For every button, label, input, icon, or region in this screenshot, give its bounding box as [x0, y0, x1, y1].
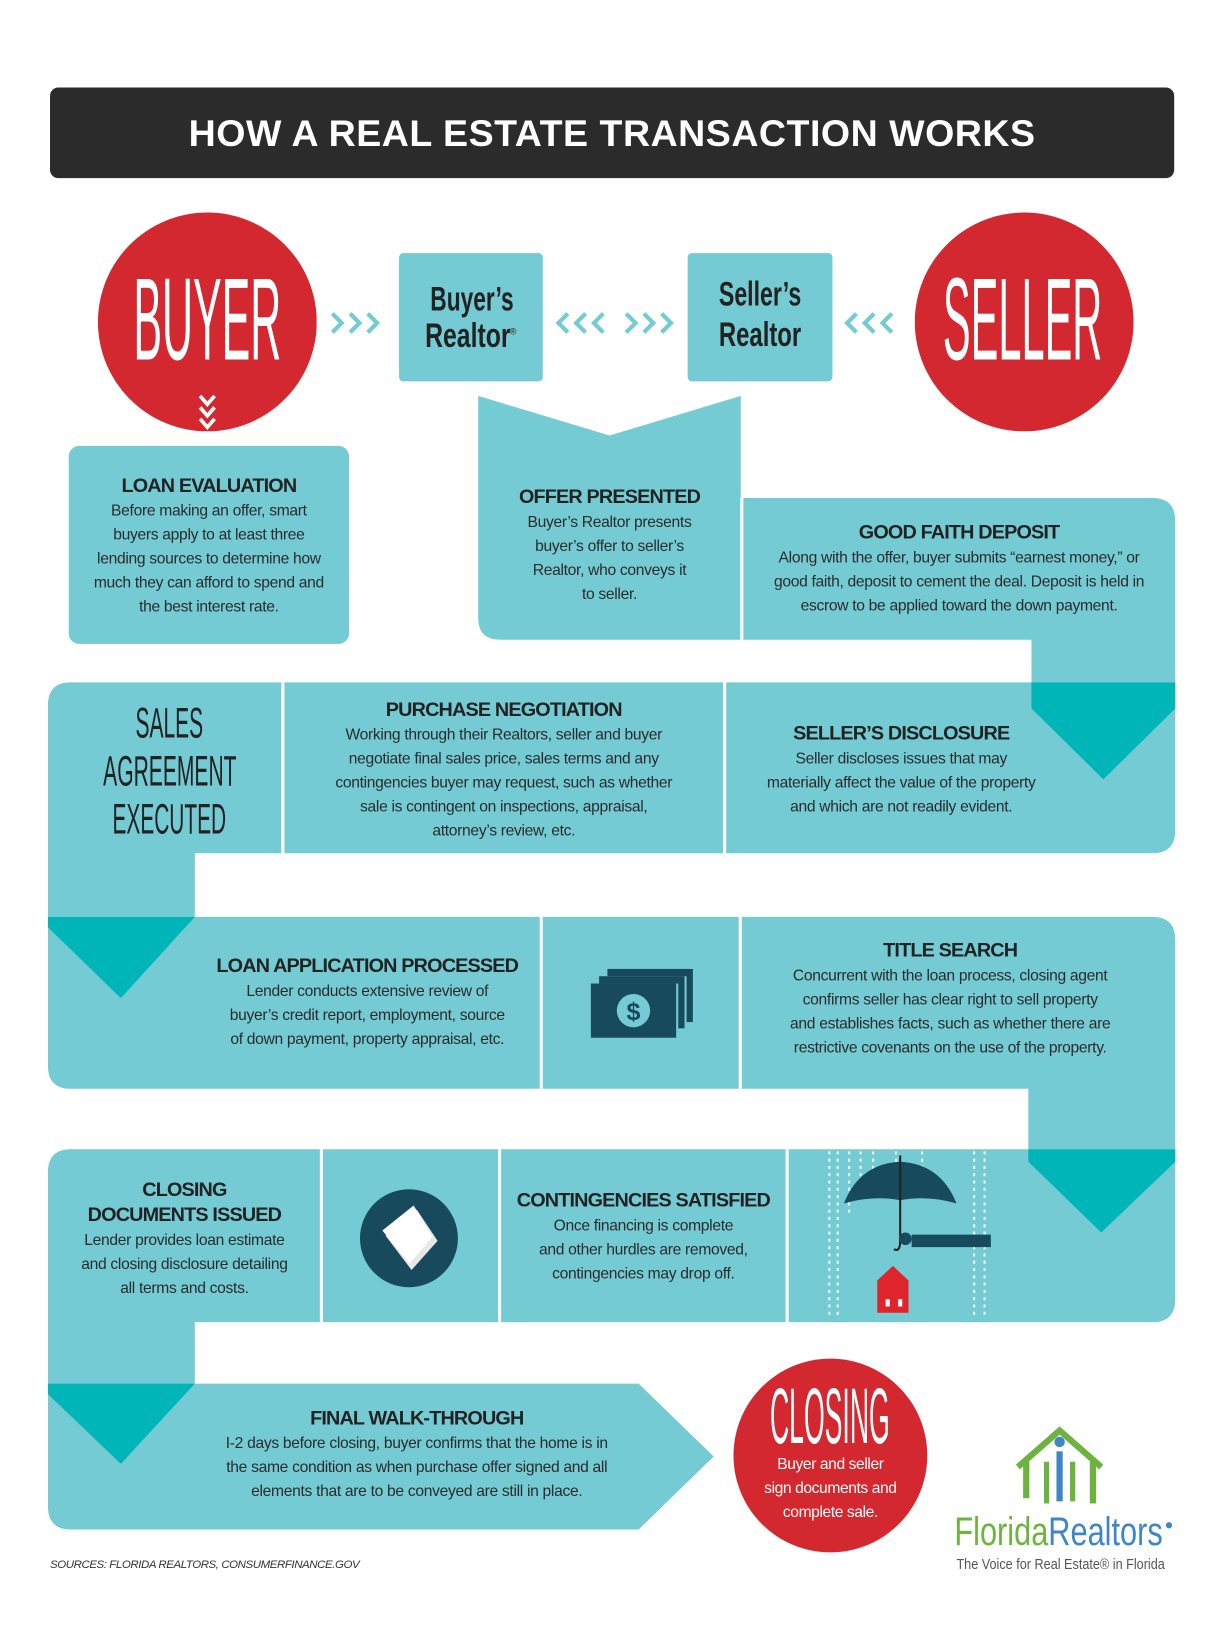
seller's disclosure: and which are not readily evident.	[790, 798, 1012, 816]
title bar: HOW A REAL ESTATE TRANSACTION WORKS	[189, 111, 1036, 154]
closing circle: complete sale.	[783, 1503, 878, 1521]
offer presented: Realtor, who conveys it	[533, 562, 686, 579]
title search	[790, 940, 1110, 1056]
closing documents issued: CLOSING	[142, 1179, 227, 1201]
contingencies satisfied: CONTINGENCIES SATISFIED	[517, 1190, 770, 1212]
good faith deposit: good faith, deposit to cement the deal. Deposit is held in	[774, 573, 1144, 591]
contingencies satisfied: and other hurdles are removed,	[539, 1241, 748, 1259]
title search: restrictive covenants on the use of the property.	[794, 1039, 1107, 1056]
seller's realtor label	[719, 275, 801, 354]
loan application processed: LOAN APPLICATION PROCESSED	[216, 955, 518, 977]
good faith deposit: escrow to be applied toward the down payment.	[801, 597, 1118, 615]
logo: florida realtors	[954, 1426, 1172, 1573]
contingencies satisfied: Once financing is complete	[554, 1217, 733, 1235]
loan application processed: buyer’s credit report, employment, source	[230, 1006, 505, 1024]
sales agreement executed	[103, 700, 237, 844]
final walk-through	[226, 1408, 608, 1500]
title search: confirms seller has clear right to sell property	[803, 991, 1098, 1009]
final walk-through: elements that are to be conveyed are still in place.	[251, 1483, 582, 1500]
final walk-through: FINAL WALK-THROUGH	[310, 1408, 523, 1429]
loan evaluation	[94, 475, 324, 616]
icon: umbrella over house in rain	[828, 1151, 991, 1315]
final walk-through: the same condition as when purchase offer signed and all	[226, 1459, 607, 1476]
buyer's realtor label: ®	[509, 326, 516, 336]
loan evaluation: buyers apply to at least three	[113, 526, 305, 544]
purchase negotiation: contingencies buyer may request, such as whether	[335, 774, 672, 792]
loan application processed: of down payment, property appraisal, etc.	[230, 1030, 504, 1048]
offer presented: Buyer’s Realtor presents	[528, 514, 691, 531]
seller's disclosure	[767, 723, 1036, 816]
arrows buyer to realtor	[331, 312, 380, 334]
buyer circle	[98, 212, 317, 432]
closing documents issued: and closing disclosure detailing	[81, 1255, 288, 1273]
seller circle	[914, 212, 1134, 432]
closing circle	[733, 1359, 927, 1552]
purchase negotiation: PURCHASE NEGOTIATION	[386, 699, 622, 721]
seller's disclosure: Seller discloses issues that may	[795, 750, 1007, 768]
closing documents issued: all terms and costs.	[120, 1279, 249, 1297]
title search: and establishes facts, such as whether there are	[790, 1015, 1110, 1033]
purchase negotiation: sale is contingent on inspections, appraisal,	[360, 798, 647, 816]
seller's disclosure: materially affect the value of the property	[767, 774, 1036, 792]
buyer's realtor label: Realtor	[425, 317, 511, 355]
arrows seller to realtor	[844, 312, 894, 334]
loan evaluation: LOAN EVALUATION	[121, 475, 296, 497]
closing circle: Buyer and seller	[777, 1456, 884, 1473]
purchase negotiation	[335, 699, 672, 840]
offer presented: to seller.	[582, 586, 637, 603]
offer presented: buyer’s offer to seller’s	[535, 538, 684, 555]
icon: documents	[360, 1189, 458, 1288]
arrows between realtors	[556, 312, 674, 334]
sources: SOURCES: FLORIDA REALTORS, CONSUMERFINANCE.GOV	[50, 1559, 359, 1571]
loan evaluation: much they can afford to spend and	[94, 574, 324, 592]
contingencies satisfied	[517, 1190, 770, 1283]
seller's disclosure: SELLER’S DISCLOSURE	[793, 723, 1009, 745]
purchase negotiation: negotiate final sales price, sales terms and any	[349, 750, 659, 768]
offer presented	[519, 487, 700, 603]
good faith deposit	[774, 522, 1144, 615]
final walk-through: I-2 days before closing, buyer confirms that the home is in	[226, 1435, 608, 1452]
offer presented: OFFER PRESENTED	[519, 487, 700, 508]
loan application processed: Lender conducts extensive review of	[246, 982, 488, 1000]
closing documents issued: DOCUMENTS ISSUED	[88, 1204, 281, 1226]
purchase negotiation: Working through their Realtors, seller and buyer	[345, 726, 662, 744]
contingencies satisfied: contingencies may drop off.	[552, 1265, 735, 1283]
closing documents issued	[81, 1179, 288, 1297]
icon: money: $	[627, 998, 641, 1026]
buyer's realtor label	[425, 280, 516, 355]
sales agreement executed: SALES	[135, 700, 203, 748]
purchase negotiation: attorney’s review, etc.	[432, 822, 575, 840]
icon: money	[590, 968, 693, 1038]
loan evaluation: Before making an offer, smart	[111, 502, 307, 520]
title search: Concurrent with the loan process, closing agent	[793, 967, 1107, 985]
good faith deposit: Along with the offer, buyer submits “earnest money,” or	[779, 549, 1140, 567]
closing documents issued: Lender provides loan estimate	[84, 1232, 285, 1249]
title search: TITLE SEARCH	[883, 940, 1017, 962]
loan application processed	[216, 955, 518, 1048]
good faith deposit: GOOD FAITH DEPOSIT	[859, 522, 1059, 544]
loan evaluation: the best interest rate.	[139, 598, 279, 616]
loan evaluation: lending sources to determine how	[97, 550, 321, 568]
closing circle: sign documents and	[764, 1479, 897, 1497]
title bar	[50, 88, 1174, 178]
